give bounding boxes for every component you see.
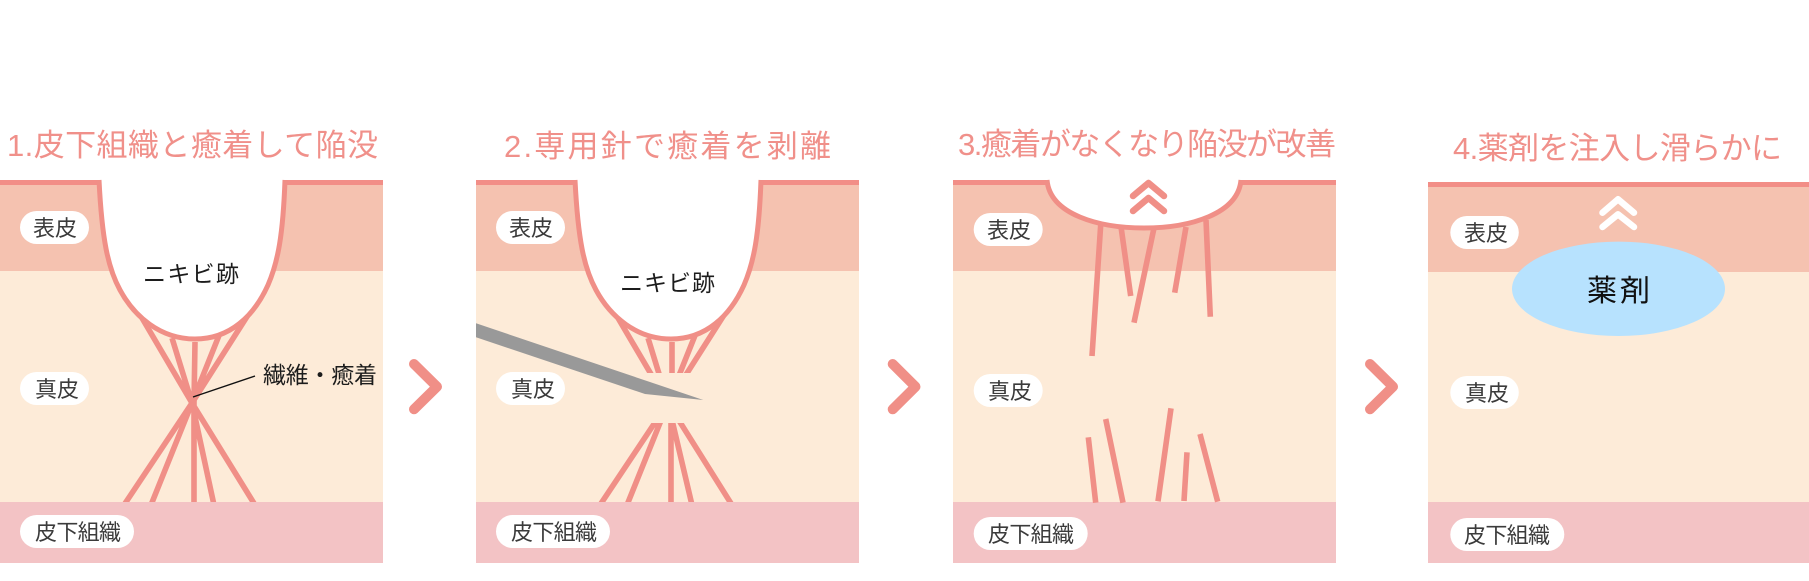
- released upper fibers: [1092, 220, 1210, 356]
- label: subcutaneous tissue: [20, 515, 134, 548]
- label: dermis: 真皮: [988, 379, 1032, 404]
- label: epidermis: 表皮: [1464, 221, 1508, 246]
- title: step 4: 4.薬剤を注入し滑らかに: [1453, 131, 1782, 166]
- label: subcutaneous tissue: [496, 515, 610, 548]
- fibers and adhesion: [124, 315, 255, 505]
- title: step 2: 2.専用針で癒着を剥離: [504, 129, 831, 164]
- subcutaneous tissue layer: [476, 502, 859, 563]
- label: dermis: 真皮: [511, 377, 555, 402]
- label: epidermis: [20, 211, 89, 244]
- epidermis layer: [476, 180, 859, 271]
- acne scar crater: [99, 180, 285, 339]
- crater label: ニキビ跡: [143, 261, 239, 287]
- dermis layer: [953, 271, 1336, 502]
- label: epidermis: [974, 213, 1043, 246]
- label: epidermis: 表皮: [33, 216, 77, 241]
- released lower fibers: [1088, 408, 1218, 503]
- icon: upward double chevron: [1133, 183, 1164, 211]
- needle: [476, 323, 703, 400]
- dermis layer: [1428, 272, 1809, 502]
- arrow: step 2 to 3: [893, 364, 916, 409]
- label: epidermis: [1450, 216, 1519, 249]
- separated fibers: [600, 315, 732, 505]
- panel: step 4 skin cross-section: [1428, 182, 1809, 563]
- panel: step 2 skin cross-section: [476, 180, 859, 563]
- label: subcutaneous tissue: [974, 517, 1088, 550]
- label: epidermis: 表皮: [509, 216, 553, 241]
- subcutaneous tissue layer: [953, 502, 1336, 563]
- label: epidermis: [496, 211, 565, 244]
- epidermis layer: [1428, 182, 1809, 272]
- label: dermis: [974, 374, 1043, 407]
- skin surface line: [1428, 182, 1809, 187]
- epidermis layer: [953, 180, 1336, 271]
- label: dermis: [496, 372, 565, 405]
- skin surface line: [953, 180, 1336, 185]
- label: subcutaneous tissue: 皮下組織: [511, 520, 597, 545]
- crater label: ニキビ跡: [620, 270, 715, 296]
- subcutaneous tissue layer: [0, 502, 383, 563]
- shallow crater: [1047, 180, 1241, 228]
- arrow: step 3 to 4: [1370, 364, 1393, 409]
- dermis layer: [476, 271, 859, 502]
- subcutaneous tissue layer: [1428, 502, 1809, 563]
- title: step 3: 3.癒着がなくなり陥没が改善: [958, 127, 1336, 162]
- dermis layer: [0, 271, 383, 502]
- label: dermis: [1450, 376, 1519, 409]
- panel: step 3 skin cross-section: [953, 180, 1336, 563]
- label: dermis: 真皮: [1465, 381, 1509, 406]
- skin surface line: [476, 180, 859, 185]
- label: subcutaneous tissue: 皮下組織: [988, 522, 1074, 547]
- label: subcutaneous tissue: 皮下組織: [1464, 523, 1550, 548]
- label: epidermis: 表皮: [987, 218, 1031, 243]
- callout: fibers and adhesion: 繊維・癒着: [263, 362, 377, 388]
- injected drug: 薬剤: [1587, 275, 1650, 308]
- label: dermis: [20, 372, 89, 405]
- epidermis layer: [0, 180, 383, 271]
- skin surface line: [0, 180, 383, 185]
- label: subcutaneous tissue: 皮下組織: [35, 520, 121, 545]
- icon: upward double chevron: [1602, 199, 1634, 227]
- callout leader line: [193, 376, 255, 397]
- label: subcutaneous tissue: [1450, 518, 1564, 551]
- acne scar crater: [575, 180, 761, 339]
- injected drug: [1512, 242, 1725, 336]
- label: dermis: 真皮: [35, 377, 79, 402]
- panel: step 1 skin cross-section: [0, 180, 383, 563]
- arrow: step 1 to 2: [414, 364, 437, 409]
- title: step 1: 1.皮下組織と癒着して陥没: [7, 128, 378, 163]
